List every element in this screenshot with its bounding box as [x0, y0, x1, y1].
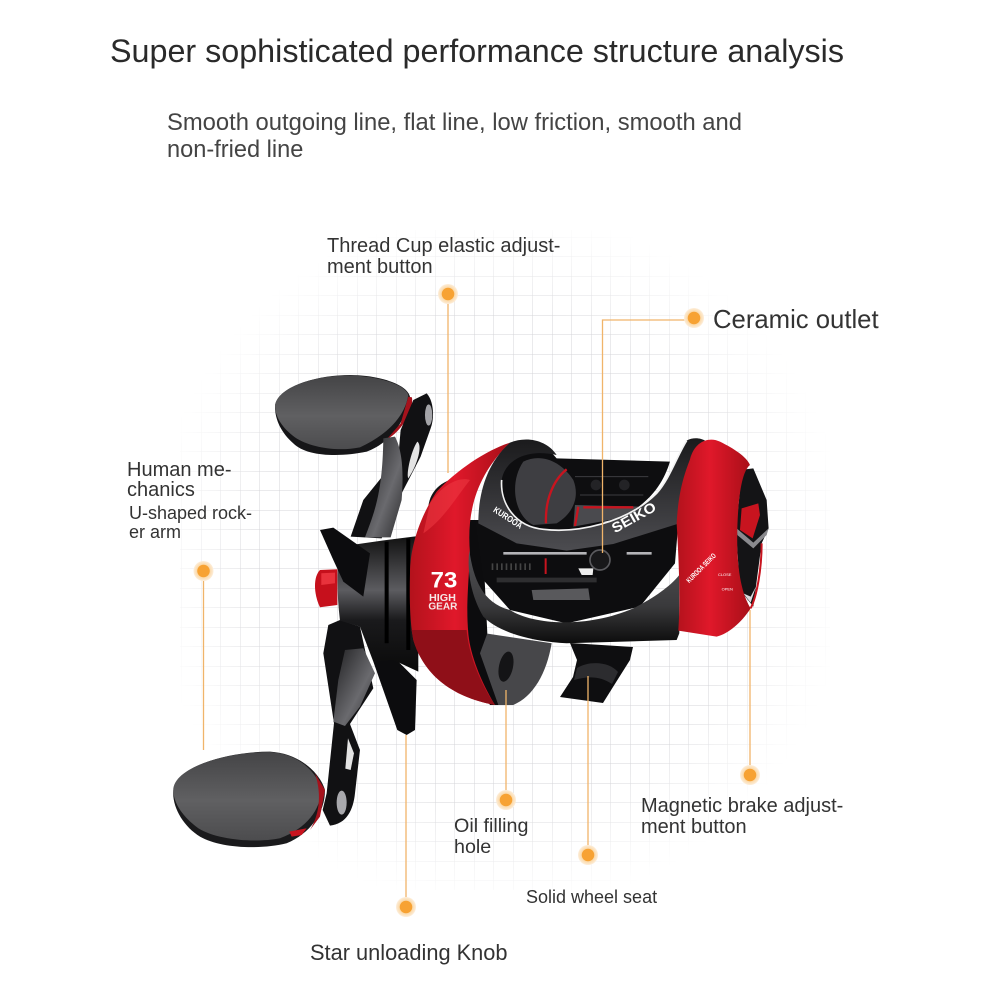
wheel seat	[560, 643, 633, 703]
callout leader lines	[204, 294, 750, 907]
U-shaped rocker arm callout: U-shaped rock-	[129, 503, 252, 523]
right side cutout and brake wheel	[736, 468, 769, 607]
U-shaped rocker arm callout: chanics	[127, 479, 195, 501]
73 high gear label: GEAR	[428, 602, 457, 613]
upper frame band: KUROOA	[492, 505, 525, 531]
73 high gear label: HIGH	[429, 593, 456, 604]
oil filling hole	[496, 650, 516, 683]
background grid	[180, 230, 830, 890]
upper handle knob	[275, 375, 412, 455]
73 high gear label	[428, 568, 457, 613]
lower star wing	[373, 657, 417, 735]
magnetic brake callout: ment button	[641, 816, 747, 838]
frame interior	[475, 520, 678, 623]
U-shaped rocker arm callout	[127, 459, 252, 581]
upper frame band	[478, 438, 705, 551]
thread cup callout	[327, 235, 560, 304]
handle hub	[337, 536, 418, 672]
upper star wing	[320, 528, 370, 597]
line guide rods	[492, 553, 652, 600]
right red side plate: KUROOA SEIKO	[684, 551, 718, 585]
oil filling hole callout	[454, 790, 528, 858]
subtitle text block	[167, 110, 742, 163]
lower frame band	[469, 550, 679, 643]
title: Super sophisticated performance structure analysis	[110, 33, 844, 69]
U-shaped rocker arm callout: er arm	[129, 522, 181, 542]
subtitle text block: Smooth outgoing line, flat line, low friction, smooth and	[167, 110, 742, 136]
right red side plate: OPEN	[722, 587, 733, 592]
reel body	[410, 438, 769, 705]
lower grey oval plate	[468, 587, 552, 705]
star unloading knob callout: Star unloading Knob	[310, 940, 508, 965]
subtitle text block: non-fried line	[167, 137, 303, 163]
right red side plate: CLOSE	[718, 572, 732, 577]
magnetic brake callout: Magnetic brake adjust-	[641, 795, 843, 817]
lower crank arm	[323, 620, 375, 826]
right red side plate	[677, 440, 762, 637]
oil filling hole callout: Oil filling	[454, 815, 528, 837]
upper crank arm	[351, 393, 433, 538]
U-shaped rocker arm callout: Human me-	[127, 459, 231, 481]
star unloading knob callout	[310, 897, 508, 965]
magnetic brake callout	[641, 765, 843, 838]
reel handle assembly	[173, 375, 433, 847]
lower handle knob	[173, 752, 325, 847]
ceramic outlet callout: Ceramic outlet	[713, 306, 879, 334]
73 high gear label: 73	[431, 568, 457, 593]
ceramic outlet	[590, 550, 610, 570]
side cap	[428, 477, 472, 530]
upper frame band: SEIKO	[609, 498, 659, 536]
spool window	[497, 443, 670, 528]
red handle cap	[315, 569, 337, 607]
oil filling hole callout: hole	[454, 836, 491, 858]
left red side plate	[410, 443, 510, 705]
solid wheel seat callout	[526, 845, 657, 907]
solid wheel seat callout: Solid wheel seat	[526, 887, 657, 907]
thread cup callout: Thread Cup elastic adjust-	[327, 235, 560, 257]
thread cup callout: ment button	[327, 256, 433, 278]
